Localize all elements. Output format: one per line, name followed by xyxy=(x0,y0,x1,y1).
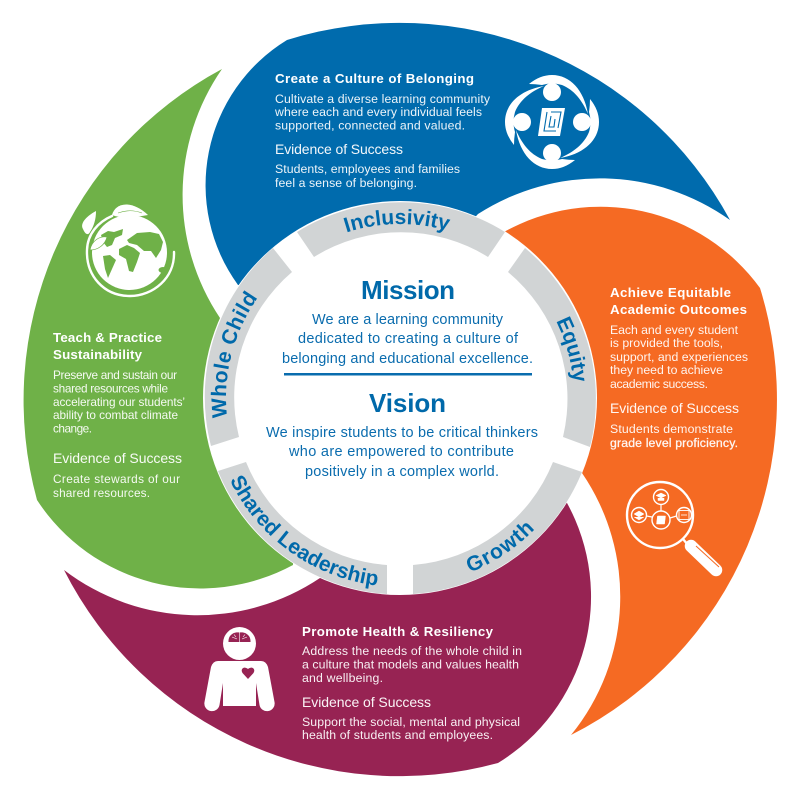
purple evidence text xyxy=(302,715,520,742)
blue evidence text: Students, employees and families xyxy=(275,162,460,176)
ring segment: Equity: Equity xyxy=(556,316,586,381)
green evidence text: shared resources. xyxy=(53,486,150,500)
vision text xyxy=(266,425,538,480)
green heading: Teach & Practice xyxy=(53,330,162,345)
panel: blue belonging xyxy=(206,23,730,300)
orange description: academic success. xyxy=(610,377,708,391)
purple evidence text: Support the social, mental and physical xyxy=(302,715,520,729)
values ring xyxy=(204,202,596,594)
ring segment: Whole Child: Whole Child xyxy=(210,290,257,418)
mission heading: Mission xyxy=(361,275,455,305)
blue evidence text xyxy=(275,162,460,190)
green description: change. xyxy=(53,422,92,436)
ring segment: Growth xyxy=(413,462,582,594)
ring segment: Growth: Growth xyxy=(466,523,534,570)
ring segment: Whole Child xyxy=(204,248,292,446)
purple evidence heading: Evidence of Success xyxy=(302,694,431,710)
purple panel shape xyxy=(64,400,591,776)
icon: magnifying glass xyxy=(627,482,719,570)
blue heading: Create a Culture of Belonging xyxy=(275,71,474,86)
orange heading: Achieve Equitable xyxy=(610,285,731,300)
orange heading: Academic Outcomes xyxy=(610,302,747,317)
panel: green sustainability xyxy=(24,69,300,588)
icon: person with brain and heart xyxy=(204,627,275,711)
center white circle xyxy=(203,201,597,595)
vision text: who are empowered to contribute xyxy=(288,444,514,460)
purple description xyxy=(302,644,522,685)
green evidence text: Create stewards of our xyxy=(53,472,180,486)
green description: accelerating our students’ xyxy=(53,395,185,409)
vision text: We inspire students to be critical thinkers xyxy=(266,425,538,441)
green evidence heading: Evidence of Success xyxy=(53,450,182,466)
divider line xyxy=(284,373,532,376)
blue evidence text: feel a sense of belonging. xyxy=(275,176,417,190)
orange evidence text xyxy=(610,422,738,450)
orange description: is provided the tools, xyxy=(610,336,723,350)
blue evidence heading: Evidence of Success xyxy=(275,141,403,157)
green heading xyxy=(53,330,162,362)
green panel shape xyxy=(24,69,300,588)
icon: circle of people xyxy=(505,75,599,169)
green description: shared resources while xyxy=(53,382,168,396)
icon: globe with leaves xyxy=(82,204,174,296)
purple heading: Promote Health & Resiliency xyxy=(302,624,494,639)
orange description: support, and experiences xyxy=(610,350,748,364)
mission text: We are a learning community xyxy=(312,312,504,328)
mission text xyxy=(282,312,533,367)
blue description xyxy=(274,92,491,132)
vision heading: Vision xyxy=(369,388,446,418)
ring segment: Equity xyxy=(508,248,596,447)
orange description: Each and every student xyxy=(610,323,739,337)
purple description: a culture that models and values health xyxy=(302,658,519,672)
green description: Preserve and sustain our xyxy=(53,368,177,382)
green evidence text xyxy=(53,472,180,500)
blue description: Cultivate a diverse learning community xyxy=(275,92,491,106)
ring segment: Inclusivity: Inclusivity xyxy=(344,209,450,233)
orange panel shape xyxy=(500,207,777,735)
panel: purple health xyxy=(64,400,591,776)
orange evidence text: Students demonstrate xyxy=(610,422,733,436)
orange evidence heading: Evidence of Success xyxy=(610,400,739,416)
green description xyxy=(53,368,185,436)
orange evidence text: grade level proficiency. xyxy=(610,436,738,450)
purple evidence text: health of students and employees. xyxy=(302,728,493,742)
blue description: where each and every individual feels xyxy=(274,105,482,119)
purple description: Address the needs of the whole child in xyxy=(302,644,522,658)
vision text: positively in a complex world. xyxy=(305,464,499,480)
orange description: they need to achieve xyxy=(610,363,723,377)
blue description: supported, connected and valued. xyxy=(275,118,465,132)
panel: orange equity xyxy=(500,207,777,735)
blue panel shape xyxy=(206,23,730,300)
mission text: dedicated to creating a culture of xyxy=(298,331,519,347)
purple description: and wellbeing. xyxy=(302,671,383,685)
mission text: belonging and educational excellence. xyxy=(282,351,533,367)
orange description xyxy=(610,323,748,391)
green heading: Sustainability xyxy=(53,347,143,362)
ring segment: Shared Leadership: Shared Leadership xyxy=(232,476,378,589)
orange heading xyxy=(610,285,747,317)
ring segment: Inclusivity xyxy=(297,202,505,257)
green description: ability to combat climate xyxy=(53,408,178,422)
